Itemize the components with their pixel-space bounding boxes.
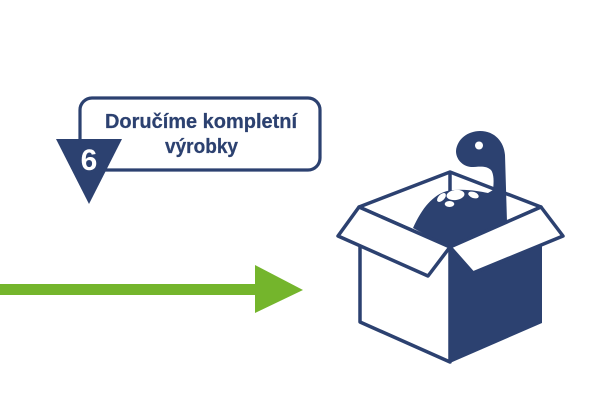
number triangle: [56, 139, 122, 204]
dinosaur: [413, 131, 507, 248]
callout heading line 2: výrobky: [165, 135, 239, 158]
dinosaur spots: [435, 189, 480, 207]
callout: step 6: [56, 98, 320, 204]
dinosaur eye: [475, 142, 483, 150]
box back interior: [359, 172, 541, 247]
box front left face: [360, 240, 450, 362]
callout heading: Doručíme kompletní: [105, 110, 298, 133]
box back centre edge: [448, 172, 452, 193]
step number: 6: [81, 144, 97, 177]
box front right face: [450, 240, 542, 363]
box right flap: [450, 207, 563, 273]
icon: dinosaur in box: [338, 131, 563, 363]
callout box: [80, 98, 320, 170]
box left flap: [338, 207, 450, 276]
arrow: [0, 265, 303, 313]
